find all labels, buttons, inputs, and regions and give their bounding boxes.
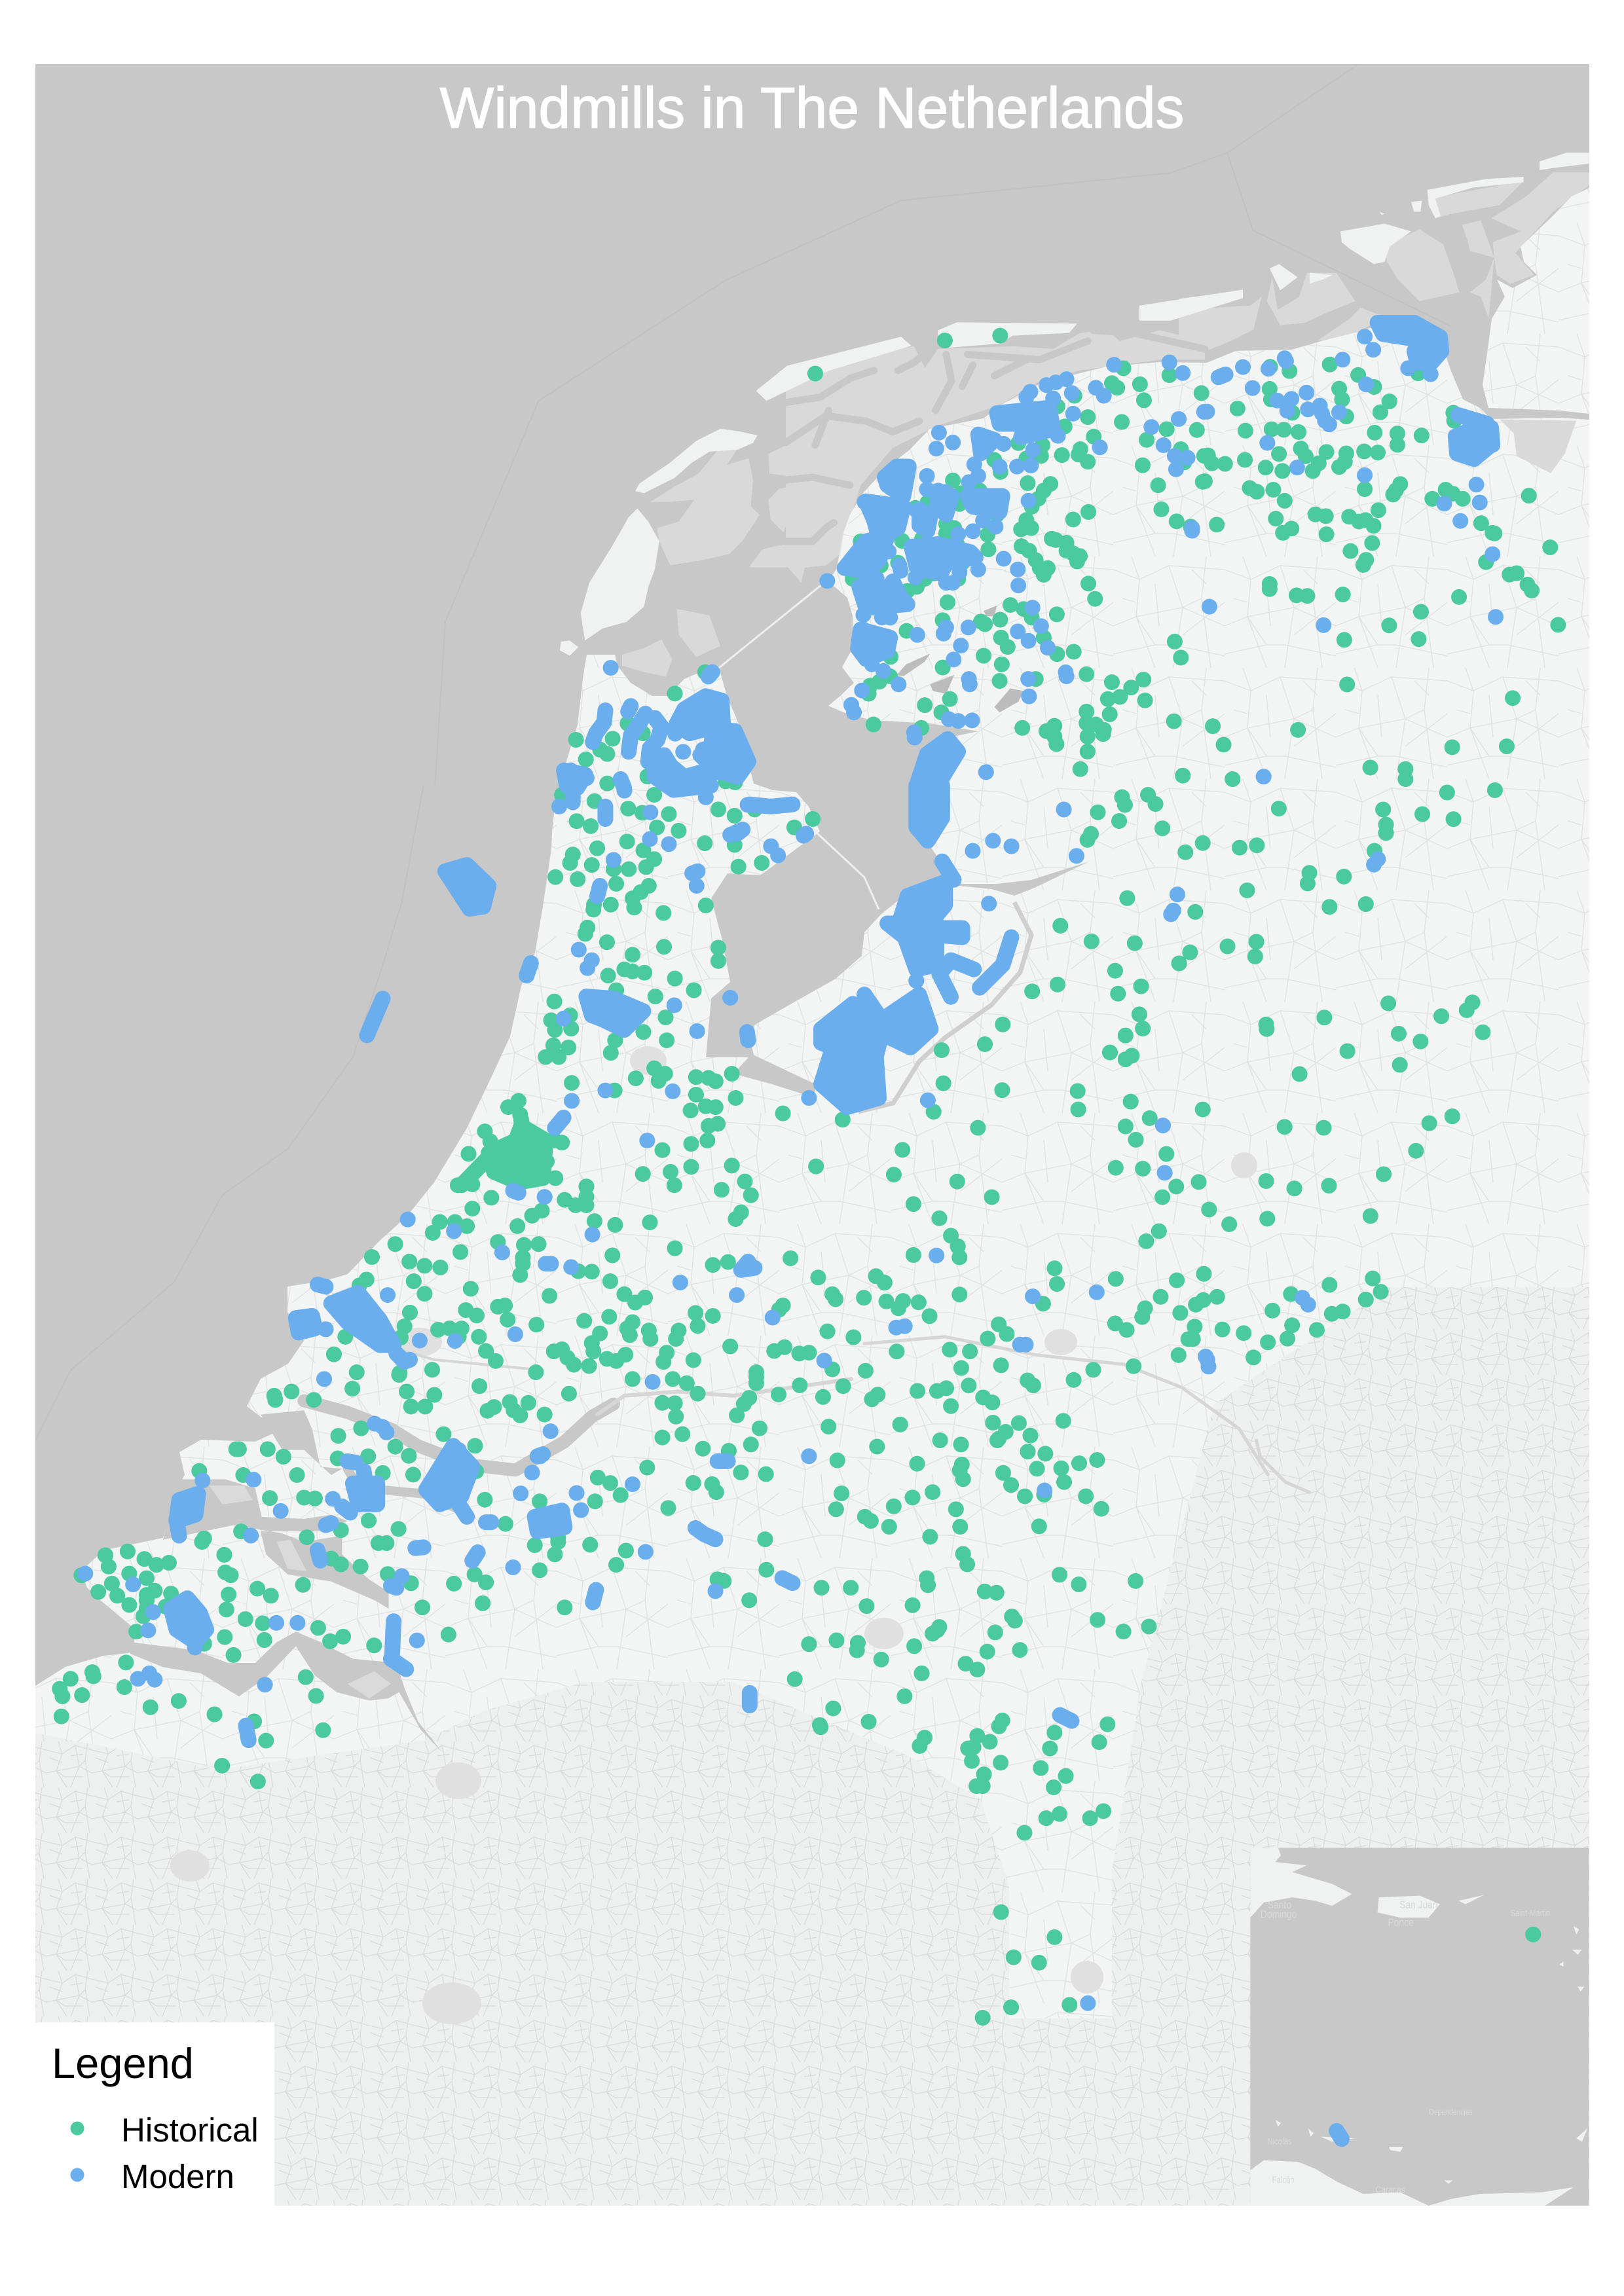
historical: east Netherlands	[853, 790, 1495, 1439]
modern: Groningen	[1207, 329, 1496, 625]
inset map: Caribbean Netherlands	[1250, 1848, 1589, 2206]
urban areas	[170, 1046, 1257, 2024]
Belgium and Germany tint	[35, 1287, 1589, 2206]
Dollard	[1500, 419, 1576, 473]
inset place labels: Domingo	[1261, 1908, 1297, 1921]
historical: Zeeland and West Brabant	[60, 1375, 843, 1781]
legend item: historical: Historical	[121, 2111, 259, 2149]
Wadden Sea flats: west	[622, 446, 805, 677]
rivers	[320, 1289, 1310, 1493]
historical: Friesland	[815, 336, 1204, 731]
Wadden Sea flats: Groningen and Ems	[1179, 172, 1589, 354]
inset sea	[1250, 1848, 1589, 2206]
modern: Eemshaven and Delfzijl blobs	[1378, 323, 1491, 459]
legend	[35, 2022, 274, 2206]
historical windmill markers	[60, 336, 1558, 2018]
islands: Rottum, Borkum, Juist and Norderney	[1179, 153, 1589, 308]
modern: Zeeland and West Brabant	[85, 1379, 653, 1740]
inset place labels: Nicolás	[1267, 2137, 1291, 2147]
Zeeland delta waters	[130, 1379, 851, 1753]
modern: North Holland wind farm blobs	[564, 696, 748, 790]
inset place labels: Ponce	[1388, 1917, 1414, 1929]
Randmeren	[858, 902, 1031, 1112]
modern: single markers near polder edge	[915, 738, 1264, 776]
historical: Groningen and Drenthe	[1205, 365, 1558, 747]
Frisian lakes	[896, 606, 1024, 712]
islands: Terschelling and Schiermonnikoog	[756, 289, 1243, 401]
inset land masses	[1250, 1848, 1587, 2206]
modern: Flevoland wind farms	[821, 786, 963, 1107]
legend item: modern: Modern	[121, 2158, 234, 2195]
modern windmill markers	[85, 323, 1496, 2139]
inset place labels: Caracas	[1375, 2185, 1405, 2195]
inset place labels: Santo	[1268, 1899, 1291, 1911]
legend item: modern	[71, 2158, 234, 2195]
island: Ameland	[938, 322, 1077, 348]
dense road texture: Belgium and Germany	[35, 1287, 1589, 2206]
inset place labels: San Juan	[1399, 1899, 1438, 1911]
inset place labels: Dependencias	[1429, 2108, 1473, 2117]
Afsluitdijk and Houtribdijk	[719, 581, 879, 909]
sea background	[35, 64, 1589, 1686]
modern: east Netherlands	[887, 809, 1378, 1366]
islands: Vlieland and Texel	[560, 429, 758, 656]
modern: offshore parks and Holland blobs	[296, 865, 643, 1345]
historical: Saint Barthelemy inset marker	[1525, 1927, 1541, 1942]
legend background	[35, 2022, 274, 2206]
modern: Brabant and Limburg	[695, 1456, 1088, 2003]
modern: Noordoostpolder coast north edge	[917, 739, 958, 786]
historical: dense cluster near Leiden	[489, 1126, 545, 1182]
historical: North Holland top	[576, 672, 735, 784]
modern: Friesland blobs	[845, 408, 1053, 659]
inset place labels	[1261, 1899, 1550, 2195]
inset place labels: Falcón	[1272, 2175, 1295, 2185]
Wadden Sea flats: Friesland	[786, 330, 1205, 568]
maritime boundary lines	[35, 65, 1450, 1440]
modern: Holland	[318, 790, 824, 1362]
modern: North Holland top	[570, 668, 743, 788]
modern: Bonaire inset marker	[1337, 2131, 1342, 2139]
historical: Friesland to Overijssel transition	[1054, 734, 1405, 779]
modern: Zeeland blobs	[171, 1446, 564, 1642]
IJsselmeer and Markermeer	[706, 581, 1089, 1057]
title: Windmills in The Netherlands	[440, 75, 1184, 140]
Wadden Islands	[560, 153, 1589, 656]
Wadden Sea channels	[786, 330, 1205, 541]
modern: Friesland	[827, 362, 1204, 733]
legend heading: Legend	[52, 2039, 194, 2087]
historical: Brabant and Limburg	[668, 1440, 1149, 2018]
Gooimeer	[733, 1054, 815, 1098]
inset place labels: Saint-Martin	[1511, 1908, 1550, 1918]
historical: Holland	[334, 795, 843, 1373]
